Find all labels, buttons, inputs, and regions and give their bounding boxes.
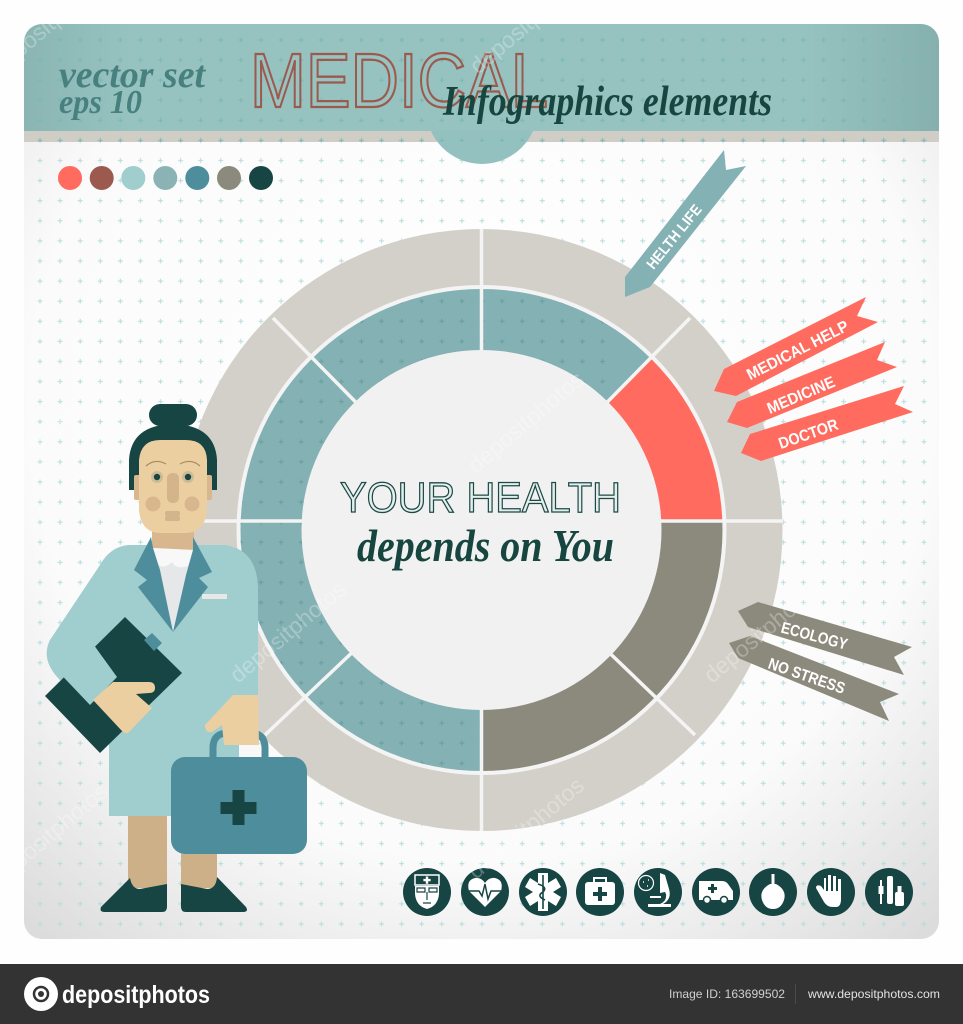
website: www.depositphotos.com (807, 987, 940, 1001)
clip (144, 633, 162, 651)
watermarks: depositphotos (699, 576, 825, 688)
hand on bag (205, 695, 259, 745)
brand name: depositphotos (62, 981, 210, 1009)
bag handle (213, 733, 265, 757)
centre disc (302, 350, 662, 710)
icon: microscope (634, 868, 682, 916)
legs (128, 810, 167, 888)
heading: vector set eps 10: vector set (59, 54, 206, 96)
face (139, 440, 207, 533)
chart: segmented ring (194, 229, 783, 831)
figure: doctor woman (45, 404, 307, 912)
ribbon: medical help: MEDICAL HELP (744, 318, 852, 384)
image id: Image ID: 163699502 (669, 987, 785, 1001)
icon: enema bulb (749, 868, 797, 916)
hand on clipboard (93, 682, 155, 733)
icon: star of life (519, 868, 567, 916)
watermarks: depositphotos (225, 172, 351, 284)
pocket (202, 594, 227, 599)
ribbon: ecology (738, 602, 912, 675)
watermarks: depositphotos (463, 366, 589, 478)
paper (239, 745, 260, 758)
inner coloured segments (240, 289, 722, 771)
watermarks: depositphotos (225, 576, 351, 688)
ribbon: medicine (727, 342, 897, 428)
coat (47, 545, 258, 816)
text: YOUR HEALTH: YOUR HEALTH (340, 474, 621, 522)
icon: surgeon (403, 868, 451, 916)
bag (171, 757, 307, 854)
ribbon: medicine: MEDICINE (765, 374, 838, 418)
brows (146, 461, 200, 466)
ribbon: doctor (741, 386, 913, 461)
eyes (151, 471, 163, 483)
bag cross (220, 790, 256, 825)
shirt (153, 548, 193, 632)
palette dots (58, 166, 273, 190)
panel: header banner (24, 24, 939, 164)
sleeve (47, 610, 117, 705)
subtitle: Infographics elements: Infographics elements (442, 79, 772, 125)
watermarks: depositphotos (463, 772, 589, 884)
icon: first aid kit (576, 868, 624, 916)
watermarks: depositphotos (699, 172, 825, 284)
logo (24, 977, 58, 1011)
ribbon: doctor: DOCTOR (776, 416, 841, 453)
nose (167, 473, 179, 503)
ribbon: no stress: NO STRESS (766, 656, 847, 698)
icon: heart pulse (461, 868, 509, 916)
hair (129, 424, 217, 490)
mouth (165, 511, 180, 516)
ears (134, 475, 142, 500)
text: depends on You: depends on You (357, 520, 614, 571)
ribbon: health life (625, 150, 746, 297)
bun (149, 404, 197, 426)
clipboard (45, 617, 182, 753)
shoes (100, 878, 167, 912)
icon: medical tools (865, 868, 913, 916)
ribbon: health life: HELTH LIFE (643, 202, 706, 273)
neck (152, 525, 194, 560)
panel: card background (24, 142, 939, 939)
title: MEDICAL: MEDICAL (250, 38, 548, 124)
watermarks (0, 0, 825, 890)
outer grey ring (180, 229, 782, 831)
heading: vector set eps 10: eps 10 (59, 84, 142, 121)
ribbon: ecology: ECOLOGY (779, 620, 849, 654)
lapels (134, 537, 173, 632)
heading: vector set eps 10 (59, 54, 206, 121)
ribbon: no stress (729, 636, 899, 721)
icon: hand (807, 868, 855, 916)
icon row (403, 868, 913, 916)
icon: ambulance (692, 868, 740, 916)
footer bar (0, 964, 963, 1024)
cheeks (146, 496, 160, 512)
ribbon: medical help (714, 297, 878, 396)
